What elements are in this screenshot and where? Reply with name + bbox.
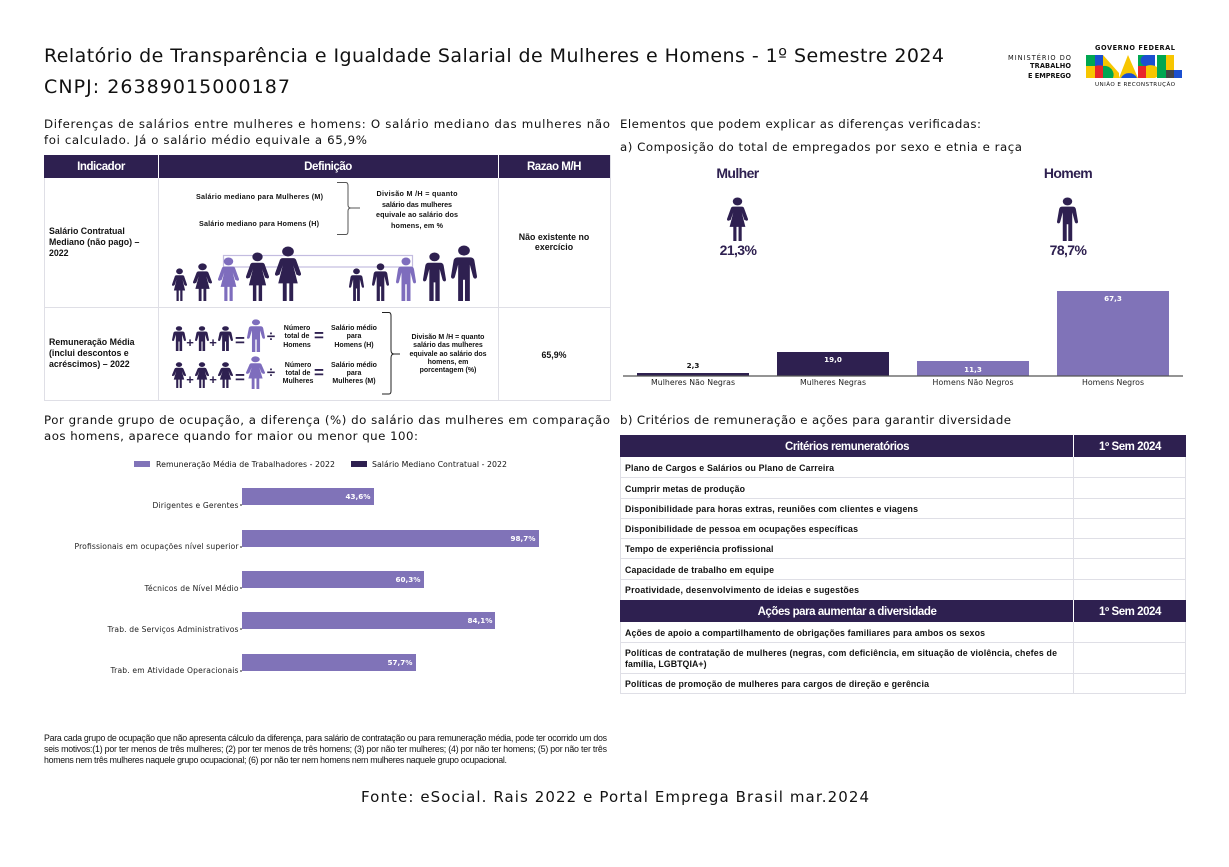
- diversity action rows: Políticas de promoção de mulheres para cargos de direção e gerência: [625, 679, 929, 689]
- text: occupation group intro: Por grande grupo de ocupação, a diferença (%) do salário das mulheres em comparação: [44, 413, 610, 427]
- title: [44, 45, 944, 98]
- criteria rows: [625, 463, 918, 595]
- row: median contractual salary: equivale ao salário dos: [376, 210, 458, 219]
- logo: Governo Federal Brasil: GOVERNO FEDERAL: [1095, 44, 1176, 52]
- row: average remuneration: Número: [285, 362, 311, 369]
- heading: explanatory elements: [620, 117, 1022, 154]
- row: median contractual salary: salário das mulheres: [382, 200, 452, 209]
- formula: women: ÷: [267, 364, 275, 381]
- row: median contractual salary: Mediano (não pago) –: [49, 237, 140, 247]
- text: wage difference summary: foi calculado. Já o salário médio equivale a 65,9%: [44, 133, 367, 147]
- bar chart: workforce composition: 11,3: [964, 365, 982, 374]
- diversity action rows: família, LGBTQIA+): [625, 659, 707, 669]
- panel: criteria and diversity table: [620, 435, 1186, 694]
- row: average remuneration: para: [347, 333, 361, 340]
- logo: Ministério do Trabalho e Emprego: TRABALHO: [1030, 62, 1071, 70]
- bar chart: workforce composition: Mulheres Negras: [800, 378, 866, 387]
- bar chart: workforce composition: Homens Negros: [1082, 378, 1144, 387]
- stat: women share: Mulher: [716, 165, 760, 181]
- formula: men: ÷: [267, 328, 275, 345]
- row: median contractual salary: Salário mediano para Mulheres (M): [196, 192, 324, 201]
- criteria rows: Disponibilidade para horas extras, reuniões com clientes e viagens: [625, 504, 918, 514]
- formula: women: =: [235, 368, 245, 387]
- text: occupation group intro: aos homens, aparece quando for maior ou menor que 100:: [44, 429, 418, 443]
- row: median contractual salary: homens, em %: [391, 221, 444, 230]
- bar chart: occupation groups: [74, 488, 539, 675]
- footnote: homens nem três mulheres naquele grupo ocupacional; (6) por não ter nem homens nem mulheres naquele grupo ocupacional.: [44, 755, 507, 765]
- logo: Governo Federal Brasil: UNIÃO E RECONSTRUÇÃO: [1095, 81, 1176, 88]
- row: average remuneration: equivale ao salário dos: [409, 351, 487, 358]
- row: average remuneration: Homens (H): [334, 342, 374, 349]
- row: average remuneration: 65,9%: [542, 350, 567, 360]
- row: average remuneration: total de: [285, 333, 310, 340]
- table headers: Ações para aumentar a diversidade: [758, 606, 936, 618]
- formula: women: +: [209, 372, 217, 387]
- bar chart: occupation groups: 98,7%: [511, 534, 535, 543]
- title: Relatório de Transparência e Igualdade Salarial de Mulheres e Homens - 1º Semestre 2024: [44, 45, 944, 67]
- row: median contractual salary: Salário Contratual: [49, 226, 125, 236]
- stat: women share: [716, 165, 760, 258]
- formula: men: =: [235, 331, 245, 350]
- bar chart: occupation groups: Trab. de Serviços Administrativos: [106, 625, 239, 634]
- row: median contractual salary: 2022: [49, 248, 69, 258]
- logo: Governo Federal Brasil: [1086, 44, 1182, 88]
- row: average remuneration: Salário médio: [331, 362, 377, 369]
- table header labels: [77, 161, 581, 173]
- row: average remuneration: homens, em: [428, 359, 468, 366]
- bar chart: occupation groups: 57,7%: [388, 658, 412, 667]
- chart legend: [134, 460, 507, 469]
- diversity action rows: Políticas de contratação de mulheres (negras, com deficiência, em situação de violência, chefes de: [625, 648, 1057, 658]
- formula: men: +: [209, 335, 217, 350]
- title: CNPJ: 26389015000187: [44, 76, 290, 98]
- bar chart: occupation groups: 43,6%: [346, 492, 370, 501]
- text: wage difference summary: [44, 117, 610, 147]
- stat: women share: 21,3%: [720, 242, 757, 258]
- panel: indicator table: [44, 155, 611, 401]
- row: average remuneration: total de: [286, 370, 311, 377]
- table header labels: Definição: [304, 161, 352, 173]
- table headers: Critérios remuneratórios: [785, 441, 909, 453]
- criteria rows: Tempo de experiência profissional: [625, 544, 774, 554]
- bar chart: occupation groups: Profissionais em ocupações nível superior: [74, 542, 239, 551]
- stat: men share: Homem: [1044, 165, 1092, 181]
- footnote: Para cada grupo de ocupação que não apresenta cálculo da diferença, para salário de contratação ou para remuneração média, pode ter ocorrido um dos: [44, 733, 608, 743]
- formula: men: [172, 319, 324, 352]
- criteria rows: Capacidade de trabalho em equipe: [625, 565, 774, 575]
- bar chart: workforce composition: 67,3: [1104, 294, 1122, 303]
- bar chart: workforce composition: 19,0: [824, 355, 842, 364]
- formula: women: =: [314, 363, 324, 382]
- row: average remuneration: para: [347, 370, 361, 377]
- formula: men: +: [186, 335, 194, 350]
- bar chart: workforce composition: [623, 291, 1183, 387]
- bar chart: occupation groups: Trab. em Atividade Operacionais: [110, 666, 239, 675]
- row: median contractual salary: Não existente no: [519, 232, 590, 242]
- footnote: [44, 733, 608, 765]
- criteria rows: Disponibilidade de pessoa em ocupações específicas: [625, 524, 858, 534]
- bar chart: occupation groups: Dirigentes e Gerentes: [152, 501, 239, 510]
- row: average remuneration: Salário médio: [331, 325, 377, 332]
- footnote: seis motivos:(1) por ter menos de três mulheres; (2) por ter menos de três homens; (3) por não ter mulheres; (4) por não ter homens; (5) por não ter três: [44, 744, 608, 754]
- table headers: [758, 441, 1162, 618]
- heading: criteria and actions: b) Critérios de remuneração e ações para garantir diversidade: [620, 413, 1011, 427]
- row: average remuneration: Homens: [283, 342, 311, 349]
- table header labels: Razao M/H: [527, 161, 581, 173]
- bar chart: workforce composition: Homens Não Negros: [932, 378, 1014, 387]
- bar chart: workforce composition: Mulheres Não Negras: [651, 378, 735, 387]
- table headers: 1º Sem 2024: [1099, 606, 1162, 618]
- heading: explanatory elements: Elementos que podem explicar as diferenças verificadas:: [620, 117, 981, 131]
- logo: Ministério do Trabalho e Emprego: MINISTÉRIO DO: [1008, 53, 1071, 62]
- table header labels: Indicador: [77, 161, 126, 173]
- formula: women: +: [186, 372, 194, 387]
- heading: explanatory elements: a) Composição do total de empregados por sexo e etnia e raça: [620, 140, 1022, 154]
- row: median contractual salary: Salário mediano para Homens (H): [199, 219, 320, 228]
- text: wage difference summary: Diferenças de salários entre mulheres e homens: O salário mediano das mulheres não: [44, 117, 610, 131]
- diversity action rows: Ações de apoio a compartilhamento de obrigações familiares para ambos os sexos: [625, 628, 985, 638]
- row: average remuneration: Número: [284, 325, 310, 332]
- row: average remuneration: acréscimos) – 2022: [49, 359, 130, 369]
- row: average remuneration: Mulheres (M): [332, 378, 376, 385]
- row: average remuneration: Remuneração Média: [49, 337, 135, 347]
- source line: Fonte: eSocial. Rais 2022 e Portal Emprega Brasil mar.2024: [361, 788, 869, 806]
- bar chart: occupation groups: Técnicos de Nível Médio: [144, 584, 239, 593]
- logo: Ministério do Trabalho e Emprego: [1008, 53, 1071, 80]
- row: median contractual salary: exercício: [535, 242, 574, 252]
- bar chart: workforce composition: 2,3: [687, 361, 699, 370]
- row: average remuneration: Divisão M /H = quanto: [412, 334, 484, 341]
- chart legend: Salário Mediano Contratual - 2022: [372, 460, 507, 469]
- row: average remuneration: Mulheres: [283, 378, 313, 385]
- stat: men share: [1044, 165, 1092, 258]
- row: average remuneration: [49, 312, 567, 394]
- row: median contractual salary: Divisão M /H = quanto: [376, 189, 458, 198]
- icons: five women by salary: [172, 247, 301, 301]
- row: median contractual salary: [49, 182, 590, 301]
- table headers: 1º Sem 2024: [1099, 441, 1162, 453]
- diversity action rows: [625, 628, 1057, 689]
- formula: women: [172, 356, 324, 389]
- criteria rows: Proatividade, desenvolvimento de ideias e sugestões: [625, 585, 859, 595]
- criteria rows: Cumprir metas de produção: [625, 484, 746, 494]
- criteria rows: Plano de Cargos e Salários ou Plano de Carreira: [625, 463, 834, 473]
- row: average remuneration: (inclui descontos e: [49, 348, 129, 358]
- text: occupation group intro: [44, 413, 610, 443]
- row: average remuneration: salário das mulheres: [413, 342, 483, 349]
- row: average remuneration: porcentagem (%): [420, 367, 476, 374]
- icons: five men by salary: [349, 246, 477, 301]
- chart legend: Remuneração Média de Trabalhadores - 2022: [156, 460, 335, 469]
- logo: Ministério do Trabalho e Emprego: E EMPREGO: [1028, 72, 1071, 80]
- formula: men: =: [314, 326, 324, 345]
- bar chart: occupation groups: 60,3%: [396, 575, 420, 584]
- stat: men share: 78,7%: [1050, 242, 1087, 258]
- bar chart: occupation groups: 84,1%: [468, 616, 492, 625]
